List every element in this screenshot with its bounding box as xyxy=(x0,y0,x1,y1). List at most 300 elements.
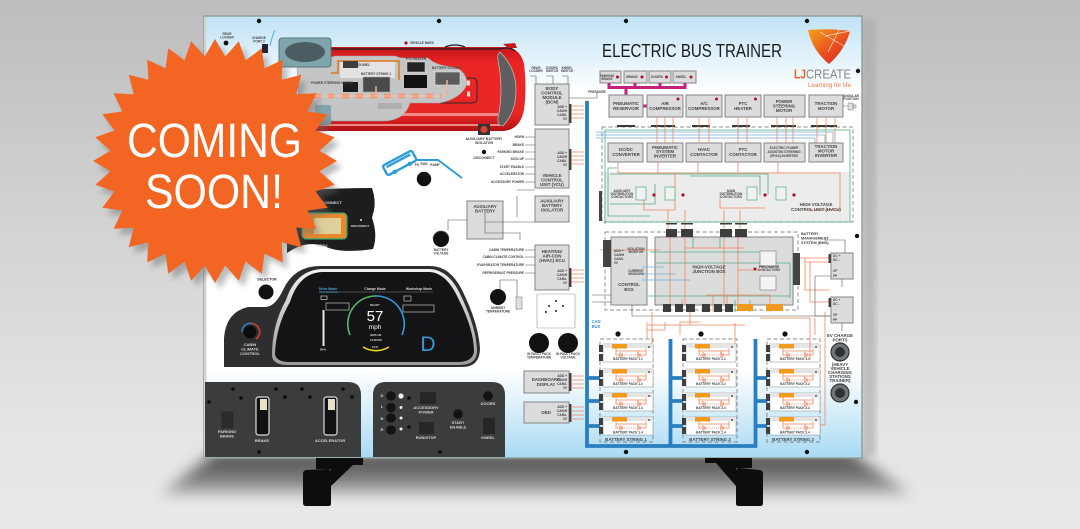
starburst xyxy=(93,39,337,283)
CAN stub wires xyxy=(571,106,584,419)
route bus icon xyxy=(382,150,418,178)
LJ Create logo xyxy=(794,28,852,89)
control modules: CAN/L xyxy=(557,413,567,417)
roof rail xyxy=(330,45,515,51)
disconnect switches xyxy=(615,331,788,337)
air system indicators: BRAKE xyxy=(601,77,613,81)
control modules: UNIT (VCU) xyxy=(540,182,564,187)
coming text: COMING xyxy=(127,115,302,168)
air system indicators: SWITCH xyxy=(561,69,574,73)
connector strips xyxy=(603,240,800,285)
string titles: BATTERY STRING 1 xyxy=(605,437,647,442)
lower housing xyxy=(378,103,402,109)
stand foot xyxy=(736,468,763,506)
high voltage control unit: PNEUMATIC xyxy=(652,145,679,150)
control modules: (BCM) xyxy=(546,100,559,104)
fuse terminals xyxy=(737,304,783,311)
board panel xyxy=(204,16,862,458)
climate knob ring xyxy=(242,323,252,332)
bus cutaway illustration: BATTERY STRING 2 xyxy=(432,66,462,70)
MSD device plate xyxy=(314,218,341,234)
orange HV frame xyxy=(331,61,399,80)
battery management system: SYSTEM (BMS) xyxy=(801,241,829,245)
port labels: ADD + xyxy=(557,105,567,109)
logo name: LJ xyxy=(794,68,806,82)
battery management system: CAN/H xyxy=(614,253,625,257)
speed unit: mph xyxy=(369,324,382,331)
control modules: 0V xyxy=(563,163,568,167)
dashboard panel xyxy=(224,266,480,367)
start enable label: START xyxy=(451,420,465,425)
floor shadow xyxy=(160,452,912,494)
high voltage control unit: ASSISTED STEERING xyxy=(767,150,801,154)
mode tabs: Drive Mode xyxy=(319,287,337,291)
control modules: CONTROL xyxy=(541,178,563,182)
control modules: EVAPORATOR TEMPERATURE xyxy=(477,263,524,267)
lower side stripe xyxy=(300,113,500,126)
control box xyxy=(611,237,647,305)
string 1 packs: BATTERY PACK 1.1 xyxy=(613,357,643,361)
route selector knob xyxy=(417,172,431,186)
control modules: CAN/H xyxy=(557,109,568,113)
accessory rocker xyxy=(420,392,436,404)
knobs and dials xyxy=(382,150,581,360)
high voltage control unit: DISTRIBUTION xyxy=(720,192,743,196)
lower air unit xyxy=(315,105,331,125)
starburst shadow xyxy=(98,45,342,289)
high voltage control unit: INVERTER xyxy=(815,153,838,158)
dashboard panel: CONTROL xyxy=(240,351,260,356)
high voltage control unit: MAIN xyxy=(727,189,736,193)
white equipment panel xyxy=(340,60,395,78)
charge port label: CHARGE xyxy=(252,36,266,40)
EV charge ports: CHARGING xyxy=(828,370,853,375)
pedal control panel: BRAKE xyxy=(220,434,234,438)
brake slider xyxy=(256,397,269,435)
string 1 packs: BATTERY PACK 1.4 xyxy=(613,430,643,434)
right stand xyxy=(705,458,763,506)
voltage knob xyxy=(433,231,449,247)
white body marks xyxy=(467,83,470,94)
MSD label: MSD2 xyxy=(316,243,328,248)
control modules: MODULE xyxy=(542,95,562,100)
control modules: ISOLATOR xyxy=(541,208,564,212)
gear buttons xyxy=(386,391,396,435)
climate knob ring warm side xyxy=(252,324,260,339)
knobs and dials: RAMP xyxy=(430,163,441,167)
string 1 packs: BATTERY PACK 1.3 xyxy=(613,406,643,410)
port 2 xyxy=(831,384,849,402)
control modules: 0V xyxy=(563,281,568,285)
selector knob xyxy=(257,278,277,300)
bus cutaway illustration: PORT 2 xyxy=(253,40,265,44)
pack temperature knob xyxy=(529,333,549,353)
high voltage control unit: CONTACTORS xyxy=(611,195,633,199)
CAN bus label: CAN xyxy=(591,319,601,324)
control modules: REFRIGERANT PRESSURE xyxy=(483,271,524,275)
mode tabs xyxy=(319,287,433,292)
parking brake label: PARKING xyxy=(218,429,236,434)
stand arm xyxy=(316,458,363,486)
control modules: ADD + xyxy=(557,405,567,409)
control modules: AIR-CON xyxy=(543,254,561,258)
pack knob labels: IN FAULT PACK xyxy=(527,352,552,356)
control modules: ACCELERATOR xyxy=(500,172,525,176)
upper component row: STEERING xyxy=(773,104,796,108)
air system indicators: KNEEL xyxy=(562,66,572,70)
logo shield xyxy=(808,29,850,64)
control modules: BATTERY xyxy=(475,208,495,214)
bus body xyxy=(300,47,526,131)
air system indicators: BRAKE xyxy=(626,75,638,79)
auxiliary battery isolator control: DISCONNECT xyxy=(473,156,495,160)
HVAC input labels: CABIN TEMPERATURE xyxy=(489,248,524,252)
string 3 packs xyxy=(766,344,820,435)
upper component row: PTC xyxy=(739,101,748,106)
string 3 packs: BATTERY PACK 3.3 xyxy=(780,406,810,410)
lower component boxes xyxy=(608,143,843,162)
rear locker label: REAR xyxy=(222,32,232,36)
doors button xyxy=(483,391,493,401)
high voltage control unit: CONTACTOR xyxy=(690,152,719,157)
logo tagline: Learning for life xyxy=(808,83,852,89)
HVAC input wires xyxy=(448,190,535,273)
left stand xyxy=(303,458,363,506)
control modules: CONTROL xyxy=(541,90,563,96)
high voltage control unit: DISTRIBUTION xyxy=(611,192,634,196)
doors label: DOORS xyxy=(481,401,496,406)
battery strings xyxy=(599,312,825,442)
EV charge ports: VEHICLE xyxy=(830,366,850,371)
control modules: CAN/L xyxy=(557,159,567,163)
auxiliary battery isolator control xyxy=(466,124,503,160)
high voltage control unit: INVERTER xyxy=(654,154,677,158)
string 2 packs: BATTERY PACK 2.3 xyxy=(696,406,726,410)
battery management system: JUNCTION BOX xyxy=(692,269,726,274)
pedal control panel xyxy=(205,382,361,457)
battery management system: MANAGEMENT xyxy=(801,236,829,240)
charge port control units: PP xyxy=(833,318,838,322)
soon text: SOON! xyxy=(145,166,283,219)
battery management system: HIGH-VOLTAGE xyxy=(692,264,726,270)
VCU input arrows xyxy=(525,137,535,182)
mounting screws xyxy=(257,19,860,454)
gauge labels: READY xyxy=(370,303,380,307)
panel plate xyxy=(373,382,505,457)
station note: (HEAVY xyxy=(832,362,848,367)
high voltage control unit: HIGH VOLTAGE xyxy=(800,202,832,207)
trainer board xyxy=(204,16,862,458)
control modules: ADD + xyxy=(557,374,567,378)
run stop rocker xyxy=(419,422,434,434)
control modules: OBD xyxy=(541,410,551,415)
control modules: CAN/L xyxy=(557,382,567,386)
route line xyxy=(412,160,462,178)
control modules: VEHICLE xyxy=(542,173,562,178)
port 1 xyxy=(831,343,849,361)
string 3 packs: BATTERY PACK 3.1 xyxy=(780,357,810,361)
top inputs: REAR xyxy=(531,66,541,70)
control modules: 0V xyxy=(563,117,568,121)
control modules: ADD + xyxy=(557,269,567,273)
isolator switch xyxy=(478,124,490,135)
contactor units xyxy=(636,187,786,200)
control modules: BRAKE xyxy=(513,143,524,147)
panel plate xyxy=(205,382,361,457)
selector label: SELECTOR xyxy=(257,278,277,282)
control modules: CABIN CLIMATE CONTROL xyxy=(482,255,524,259)
string 3 packs: BATTERY PACK 3.4 xyxy=(780,430,810,434)
battery management system: PRECHARGE xyxy=(759,265,779,269)
control modules: CAN/L xyxy=(557,277,567,281)
drive control panel: ENABLE xyxy=(450,424,467,430)
disconnect indicator xyxy=(360,219,362,221)
CAN bus xyxy=(587,101,767,446)
connector blocks xyxy=(569,104,602,422)
accessory label: ACCESSORY xyxy=(413,405,439,410)
isolator label: AUXILIARY BATTERY xyxy=(466,137,503,141)
panel screws xyxy=(407,396,442,454)
control modules: BATTERY xyxy=(542,203,562,208)
panel shape xyxy=(224,266,480,367)
equipment units xyxy=(363,77,390,92)
coming soon starburst xyxy=(93,39,342,289)
BMS wiring xyxy=(648,237,790,312)
speed gauge arcs xyxy=(348,296,404,351)
EV charge ports xyxy=(827,333,853,402)
component boxes xyxy=(609,95,843,117)
CAN bus trunk xyxy=(587,101,767,446)
bus cutaway illustration: PTC HEATER xyxy=(406,57,427,61)
bus cutaway illustration xyxy=(220,30,526,131)
module labels: BODY xyxy=(546,86,558,91)
battery management system: SENSORS xyxy=(628,272,644,276)
EV charge ports: PORTS xyxy=(832,338,848,342)
signal wires xyxy=(605,130,850,224)
string 2 packs: BATTERY PACK 2.2 xyxy=(696,382,726,386)
high voltage control unit: SYSTEM xyxy=(656,149,674,154)
battery strings: BATTERY STRING 2 xyxy=(689,437,731,442)
indicator lamps xyxy=(616,76,692,78)
control modules: 0V xyxy=(563,417,568,421)
control modules: PARKING BRAKE xyxy=(497,150,524,154)
high voltage control unit: CONTACTOR xyxy=(729,152,758,157)
air system indicators: DOORS xyxy=(651,75,663,79)
charge port control units: DC - xyxy=(833,302,840,306)
string 2 packs: BATTERY PACK 2.4 xyxy=(696,430,726,434)
start enable button xyxy=(453,409,463,419)
brake handle xyxy=(260,399,267,410)
EV charge ports: STATIONS xyxy=(829,374,851,379)
VCU input labels: HORN xyxy=(515,135,525,139)
high voltage junction box xyxy=(655,237,793,305)
charge port control units: CP xyxy=(833,313,838,317)
silver bezel xyxy=(272,269,477,365)
upper component row xyxy=(609,94,860,117)
HVCU labels: AUXILIARY xyxy=(613,189,631,193)
battery management system: BOX xyxy=(624,287,634,292)
accelerator handle xyxy=(328,399,335,410)
accelerator label: ACCELERATOR xyxy=(315,438,345,443)
high voltage control unit xyxy=(596,117,853,230)
MSD panel xyxy=(287,188,375,253)
drive control panel xyxy=(373,382,505,457)
string 2 packs: BATTERY PACK 2.1 xyxy=(696,357,726,361)
pack voltage knob xyxy=(558,333,578,353)
knobs and dials: TEMPERATURE xyxy=(527,356,551,360)
display screen xyxy=(275,272,474,362)
dashboard panel: CLIMATE xyxy=(370,338,382,342)
high voltage control unit: HVAC xyxy=(698,147,711,152)
control modules: START ENABLE xyxy=(500,165,524,169)
drive control panel: POWER xyxy=(418,410,434,414)
upper component row: TRACTION xyxy=(815,101,837,106)
high voltage control unit: CONVERTER xyxy=(612,152,641,157)
BMS label: BATTERY xyxy=(801,232,819,236)
charge port control units: DC + xyxy=(833,298,840,302)
high voltage control unit: MOTOR xyxy=(818,148,835,154)
battery management system: MONITOR xyxy=(628,250,644,254)
auxiliary battery isolator control: ISOLATOR xyxy=(475,141,494,145)
contactor lamps xyxy=(652,193,796,197)
route labels: PS xyxy=(415,163,419,167)
port label: EV CHARGE xyxy=(827,333,853,338)
gauge panel xyxy=(537,294,575,328)
upper component row: RESERVOIR xyxy=(613,106,640,111)
charge port control units xyxy=(800,240,853,331)
climate label: CABIN xyxy=(244,342,256,347)
lower component labels: DC/DC xyxy=(619,147,634,152)
control modules: KICK-UP xyxy=(511,157,525,161)
string 2 packs xyxy=(682,344,736,435)
roof mirror xyxy=(503,43,517,48)
EV charge ports: TRAINER) xyxy=(830,378,851,383)
selector dial xyxy=(258,284,274,300)
precharge relays xyxy=(760,251,776,290)
air system indicators xyxy=(529,66,696,106)
gear indicator: D xyxy=(420,333,436,356)
upper component row: AIR xyxy=(661,101,670,106)
coolant pump xyxy=(516,297,522,309)
gauge panel dots xyxy=(545,300,564,313)
bus cutaway illustration: POWER STEERING MOTOR xyxy=(311,81,354,85)
gear LEDs xyxy=(398,393,404,430)
board left edge xyxy=(204,17,206,457)
BMS labels: ISOLATION xyxy=(627,247,645,251)
knobs and dials: TEMPERATURE xyxy=(486,310,510,314)
drive control panel: R xyxy=(381,427,384,432)
status lamps xyxy=(676,98,757,100)
high voltage control unit: (EPAS) INVERTER xyxy=(770,154,798,158)
BMS dashed boundary xyxy=(605,232,798,310)
dashboard panel: CLIMATE xyxy=(241,346,259,352)
vertical HV drops xyxy=(376,80,447,96)
body cable loop xyxy=(440,78,477,103)
control modules: CAN/H xyxy=(557,378,568,382)
vehicle bars indicator xyxy=(404,41,408,45)
indicator boxes xyxy=(600,71,696,83)
upper component row: MOTOR xyxy=(818,106,835,111)
knobs and dials: VOLTAGE xyxy=(434,252,448,256)
HVCU interior xyxy=(604,172,850,222)
HV main line xyxy=(300,95,442,97)
CAN bus label: BUS xyxy=(592,324,601,329)
MSD device xyxy=(302,213,347,239)
drive control panel: L xyxy=(381,404,384,409)
accelerator slider xyxy=(324,397,337,435)
precharge lamp xyxy=(754,268,756,270)
cutaway labels: DOWEL xyxy=(358,63,370,67)
battery management system: CAN/L xyxy=(614,257,624,261)
control modules: 0V xyxy=(563,386,568,390)
knobs and dials: RUN xyxy=(421,162,428,166)
logo star rays xyxy=(820,28,850,52)
bus cutaway illustration: VEHICLE BARS xyxy=(410,41,434,45)
upper component row: COMPRESSOR xyxy=(649,106,682,111)
state of charge bar xyxy=(322,310,324,346)
unit labels: DC + xyxy=(833,254,840,258)
battery management system: 0V xyxy=(614,261,619,265)
knobs and dials: IN FAULT PACK xyxy=(556,352,581,356)
cutaway interior xyxy=(297,56,467,121)
string 3 packs: BATTERY PACK 3.2 xyxy=(780,382,810,386)
battery management system xyxy=(592,223,845,316)
title: ELECTRIC BUS TRAINER xyxy=(602,41,782,61)
battery management system: CONTROL xyxy=(618,282,640,287)
string 1 packs xyxy=(599,344,653,435)
upper component row: COMPRESSOR xyxy=(688,106,721,111)
control modules: CAN/H xyxy=(557,273,568,277)
charge port control units: CP xyxy=(833,269,838,273)
bus cutaway illustration: LOCKER xyxy=(220,36,234,40)
magenta air manifold xyxy=(609,83,686,106)
speed reading: 57 xyxy=(367,308,383,325)
charge port control units: PP xyxy=(833,274,838,278)
control modules: CAN/H xyxy=(557,155,568,159)
high voltage control unit: CONTROL UNIT (HVCU) xyxy=(791,207,841,212)
bus status icons xyxy=(321,296,434,312)
kneel rocker xyxy=(483,418,495,434)
feed wires xyxy=(647,312,825,425)
air system indicators: DOORS xyxy=(546,66,558,70)
air system indicators: KNEEL xyxy=(676,75,686,79)
drive control panel: N xyxy=(381,416,384,421)
mode tabs: Charge Mode xyxy=(364,287,386,291)
stand arm xyxy=(705,458,752,486)
panel screws xyxy=(207,387,354,454)
control modules: AUXILIARY xyxy=(473,204,497,209)
HVCU link terminals xyxy=(666,223,747,237)
indicator labels: PARKING xyxy=(600,74,615,78)
upper component row: ANGULAR xyxy=(843,94,860,98)
charge port control units: DC - xyxy=(833,258,840,262)
control modules: DISPLAY xyxy=(537,382,555,387)
disconnect label: DISCONNECT xyxy=(351,224,370,228)
contact bars xyxy=(617,125,837,127)
gear letters: D xyxy=(381,393,384,398)
control modules: AUXILIARY xyxy=(540,198,564,204)
string boundaries xyxy=(600,339,820,442)
control modules xyxy=(448,84,602,423)
parking brake switch xyxy=(222,412,233,428)
high voltage control unit: CONTACTORS xyxy=(720,195,742,199)
battery management system: CURRENT xyxy=(628,269,644,273)
high voltage control unit: ELECTRIC POWER xyxy=(770,146,799,150)
MSD black plate xyxy=(287,188,375,253)
roof air unit xyxy=(279,38,331,67)
mode tabs: Workshop Mode xyxy=(406,287,432,291)
upper component row: POWER xyxy=(776,99,793,104)
